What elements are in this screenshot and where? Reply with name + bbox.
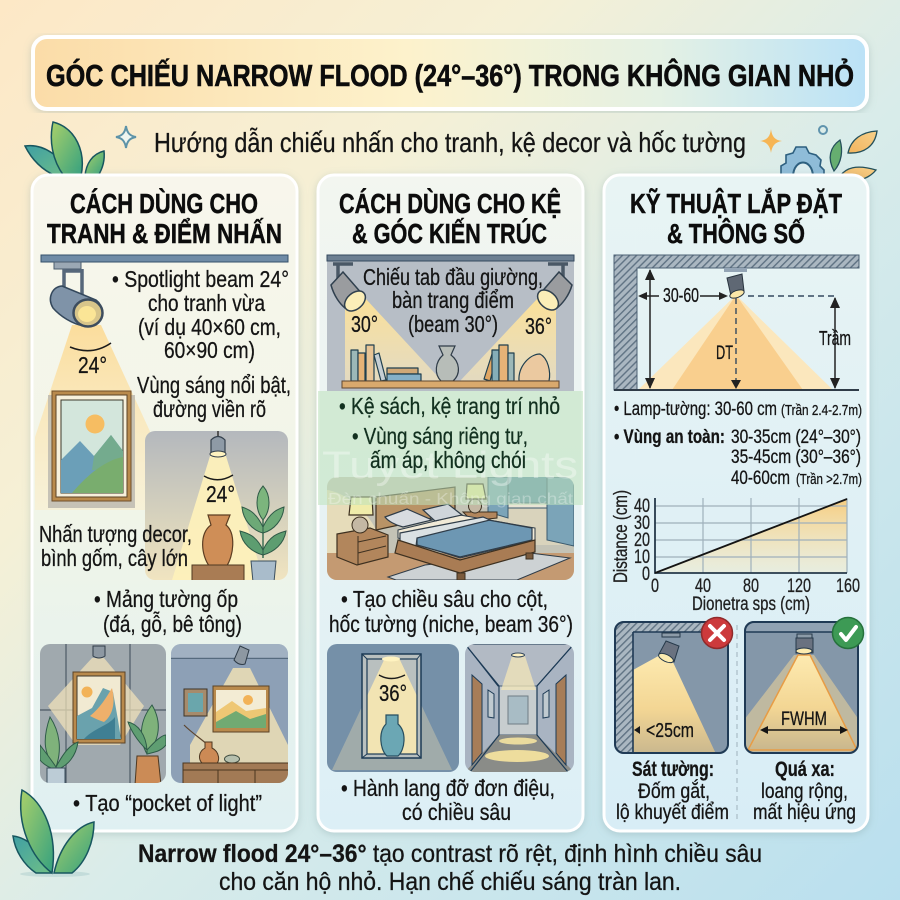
text: shelf notes: ấm áp, không chói: [370, 447, 526, 473]
text: lamp-wall and safe zone: • Lamp-tường: 30-60 cm: [614, 399, 777, 420]
panel: tranh và điểm nhấn: [32, 175, 297, 831]
text: spotlight: (ví dụ 40×60 cm,: [138, 314, 281, 340]
text: wall cladding: (đá, gỗ, bê tông): [103, 611, 242, 637]
text: lamp-wall and safe zone: 40-60cm: [731, 468, 790, 489]
text: niche: hốc tường (niche, beam 36°): [329, 611, 573, 637]
panel: kệ và góc kiến trúc: [318, 175, 583, 831]
footer summary: [138, 840, 762, 896]
illustration: vase and plant under pendant: [145, 431, 288, 585]
text: lamp-wall and safe zone: • Vùng an toàn:: [614, 427, 725, 448]
text: lamp-wall and safe zone: [614, 399, 862, 489]
chart: distance vs diameter: 0: [651, 576, 659, 597]
books right: [484, 345, 550, 381]
illustration: niche with vase: 36°: [379, 680, 407, 706]
heading: TRANH & ĐIỂM NHẤN: [47, 218, 282, 249]
illustration: too close to wall: [614, 621, 729, 754]
text: wall cladding: • Mảng tường ốp: [94, 586, 238, 612]
chart: distance vs diameter: 160: [836, 576, 860, 597]
illustration: niche with vase: [327, 644, 459, 772]
watermark: Tuyet Lights: [322, 445, 578, 487]
chart: distance vs diameter: Distance (cm): [611, 490, 632, 583]
text: spotlight: cho tranh vừa: [148, 290, 265, 316]
text: too close: Đốm gắt,: [638, 780, 710, 803]
beam angle 24°: [70, 343, 111, 378]
text: decor: [39, 521, 192, 571]
footer summary: Narrow flood 24°–36° tạo contrast rõ rệt, định hình chiều sâu: [138, 840, 762, 868]
illustration: too far from wall: FWHM: [781, 709, 827, 730]
text: too far: Quá xa:: [775, 758, 835, 781]
illustration: shelf with two spotlights: 36°: [525, 313, 552, 339]
text: too far: mất hiệu ứng: [753, 801, 856, 824]
books left: [351, 345, 421, 381]
illustration: shelf with two spotlights: (beam 30°): [408, 311, 498, 337]
text: pocket of light: • Tạo “pocket of light”: [73, 790, 262, 816]
text: lamp-wall and safe zone: (Trần >2.7m): [796, 472, 862, 488]
watermark: [318, 391, 583, 508]
text: wall cladding: [94, 586, 242, 637]
chart: distance vs diameter: 10: [634, 547, 650, 568]
heading: & THÔNG SỐ: [667, 217, 805, 249]
text: shelf notes: • Vùng sáng riêng tư,: [352, 423, 528, 449]
title banner: [33, 37, 867, 109]
panel: kỹ thuật lắp đặt: [604, 175, 868, 831]
text: shelf notes: • Kệ sách, kệ trang trí nhỏ: [339, 393, 560, 419]
icon: green check badge: [832, 618, 864, 648]
chart: distance vs diameter: 30: [634, 513, 650, 534]
text: too far: [753, 758, 856, 824]
footer summary: cho căn hộ nhỏ. Hạn chế chiếu sáng tràn lan.: [219, 868, 681, 896]
illustration: shelf with two spotlights: [327, 255, 574, 391]
chart: distance vs diameter: [611, 490, 860, 615]
icon: sparkle blue: [116, 126, 136, 148]
text: too close: lộ khuyết điểm: [616, 801, 729, 824]
icon: leaves top left: [25, 122, 104, 176]
heading: CÁCH DÙNG CHO KỆ: [339, 188, 561, 219]
illustration: shelf with two spotlights: Chiếu tab đầu giường,: [363, 264, 543, 290]
text: niche: • Tạo chiều sâu cho cột,: [341, 586, 548, 612]
track rail: [41, 255, 288, 269]
text: too far: loang rộng,: [761, 780, 848, 803]
chart: distance vs diameter: 80: [743, 576, 759, 597]
chart: distance vs diameter: 40: [634, 496, 650, 517]
illustration: too close to wall: <25cm: [646, 720, 694, 742]
text: spotlight: • Spotlight beam 24°: [112, 266, 289, 292]
text: spotlight: đường viền rõ: [153, 396, 266, 422]
text: corridor: có chiều sâu: [402, 799, 511, 825]
illustration: bedroom: [327, 477, 574, 580]
icon: red cross badge: [702, 618, 732, 648]
text: spotlight: [112, 266, 291, 422]
text: corridor: [341, 775, 555, 825]
icon: spotlight: [50, 269, 102, 326]
heading: [630, 188, 842, 249]
chart: distance vs diameter: 40: [695, 576, 711, 597]
heading: KỸ THUẬT LẮP ĐẶT: [630, 188, 842, 219]
text: too close: [616, 758, 729, 824]
icon: gear and leaves top right: [781, 126, 877, 180]
watermark: Đèn chuẩn - Không gian chất: [328, 490, 574, 508]
chart: distance vs diameter: 0: [642, 564, 650, 585]
text: spotlight: Vùng sáng nổi bật,: [137, 372, 291, 398]
text: spotlight: 60×90 cm): [164, 337, 255, 363]
illustration: wall with landscape artwork and console: [171, 644, 293, 788]
text: lamp-wall and safe zone: 35-45cm (30°–36°): [731, 447, 861, 468]
text: shelf notes: [339, 393, 560, 473]
heading: [339, 188, 561, 249]
heading: & GÓC KIẾN TRÚC: [352, 218, 547, 249]
heading: CÁCH DÙNG CHO: [70, 188, 258, 219]
text: too close: Sát tường:: [632, 758, 714, 781]
diagram: lamp-wall distance: [614, 255, 859, 390]
text: lamp-wall and safe zone: 30-35cm (24°–30°): [731, 427, 861, 448]
icon: framed painting: [48, 391, 135, 508]
illustration: shelf with two spotlights: 30°: [351, 311, 378, 337]
text: decor: Nhấn tượng decor,: [39, 521, 192, 547]
illustration: shelf with two spotlights: bàn trang điểm: [392, 287, 514, 313]
illustration: vase and plant under pendant: 24°: [206, 481, 235, 507]
beam of spotlight: [35, 325, 177, 510]
icon: leaves bottom left: [13, 790, 94, 877]
illustration: too far from wall: [744, 621, 859, 754]
illustration: stone wall with artwork: [40, 644, 166, 785]
text: corridor: • Hành lang đỡ đơn điệu,: [341, 775, 555, 801]
text: lamp-wall and safe zone: (Trần 2.4-2.7m): [781, 403, 862, 419]
chart: distance vs diameter: Dionetra sps (cm): [692, 594, 810, 615]
divider: [736, 625, 738, 820]
subtitle: Hướng dẫn chiếu nhấn cho tranh, kệ decor và hốc tường: [154, 127, 746, 158]
diagram: lamp-wall distance: DT: [716, 343, 733, 364]
icon: sparkle orange: [760, 129, 782, 153]
heading: [47, 188, 282, 249]
vase: [436, 346, 458, 381]
illustration: corridor: [465, 644, 574, 772]
beam angle 24°: 24°: [78, 352, 107, 378]
diagram: lamp-wall distance: Trầm: [819, 328, 851, 350]
text: decor: bình gốm, cây lớn: [41, 545, 188, 571]
chart: distance vs diameter: 120: [787, 576, 811, 597]
diagram: lamp-wall distance: 30-60: [663, 285, 699, 307]
chart: distance vs diameter: 20: [634, 530, 650, 551]
text: niche: [329, 586, 573, 637]
